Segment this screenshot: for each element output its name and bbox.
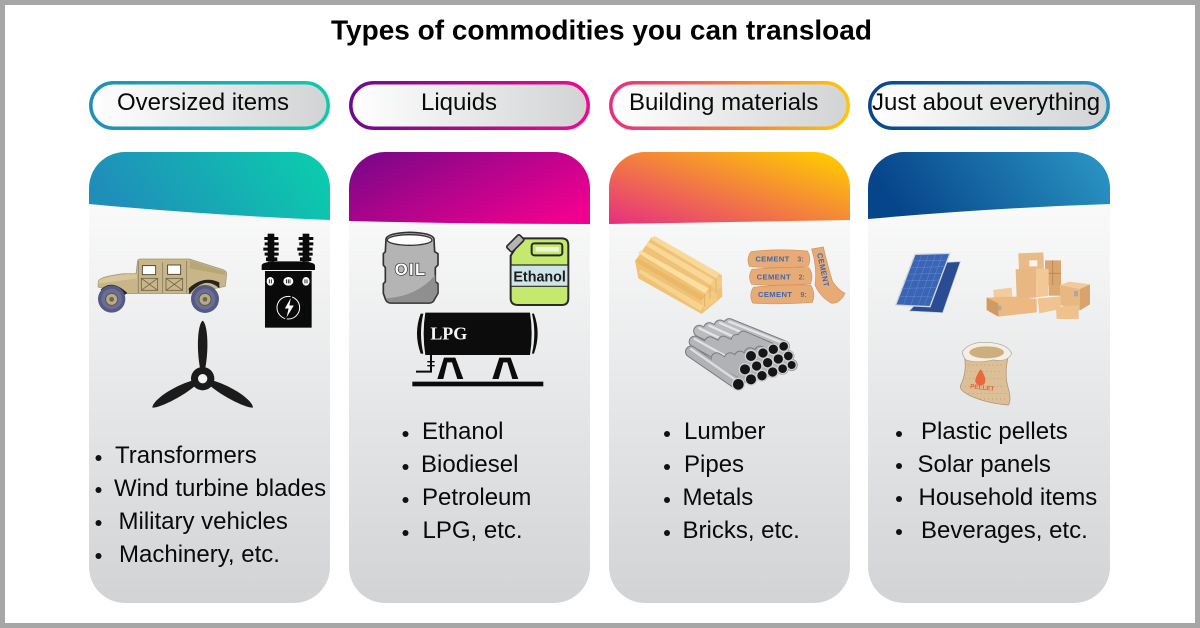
list: just about everything: Beverages, etc.: [921, 517, 1088, 544]
list: building materials: Metals: [682, 484, 753, 511]
list: oversized items: Transformers: [115, 442, 257, 469]
icon: plastic pellet sack: PELLET: [970, 383, 995, 393]
list: liquids: [402, 418, 531, 544]
icon: oil drum: OIL: [395, 260, 427, 279]
pill: Oversized items: [91, 83, 328, 128]
pill: Liquids: Liquids: [421, 89, 497, 116]
icon: cement bags: 2:: [799, 274, 805, 281]
panel header: liquids: [349, 152, 590, 224]
list: liquids: Ethanol: [422, 418, 503, 445]
panel header: just about everything: [868, 152, 1110, 219]
list: building materials: Pipes: [684, 451, 744, 478]
pill: Building materials: [611, 83, 848, 128]
title: Types of commodities you can transload: [331, 14, 872, 46]
list: building materials: Bricks, etc.: [682, 517, 800, 544]
panel: oversized items: [89, 152, 330, 603]
icon: military vehicle: [98, 259, 227, 313]
icon: cement bags: [748, 247, 845, 304]
panel header: oversized items: [89, 152, 330, 220]
list: oversized items: Military vehicles: [118, 508, 288, 535]
icon: transformer: [262, 234, 315, 328]
panel: building materials: [609, 152, 850, 603]
list: liquids: Petroleum: [422, 484, 531, 511]
icon: cement bags: CEMENT: [755, 255, 790, 264]
panel: liquids: [349, 152, 590, 603]
list: just about everything: Household items: [918, 484, 1097, 511]
pill: Just about everything: Just about everything: [872, 89, 1100, 116]
icon: stacked pipes: [691, 322, 796, 390]
icon: cement bags: CEMENT: [758, 290, 792, 299]
pill: Liquids: [351, 83, 588, 128]
icon: ethanol jerrycan: Ethanol: [513, 270, 566, 286]
list: just about everything: Plastic pellets: [921, 418, 1068, 445]
icon: cement bags: CEMENT: [815, 252, 831, 288]
icon: cardboard boxes: [987, 252, 1090, 319]
pill: Just about everything: [870, 83, 1108, 128]
icon: LPG tank: LPG: [430, 324, 467, 344]
list: oversized items: Wind turbine blades: [114, 475, 326, 502]
pill: Building materials: Building materials: [629, 89, 818, 116]
icon: cement bags: 9:: [800, 292, 807, 299]
list: liquids: LPG, etc.: [422, 517, 523, 544]
list: oversized items: Machinery, etc.: [119, 541, 280, 568]
icon: LPG tank: [412, 313, 543, 386]
list: just about everything: [896, 418, 1097, 544]
icon: wind turbine blades: [152, 321, 253, 408]
panel header: building materials: [609, 152, 850, 224]
list: liquids: Biodiesel: [421, 451, 518, 478]
icon: ethanol jerrycan: [506, 234, 568, 305]
list: building materials: Lumber: [684, 418, 765, 445]
list: just about everything: Solar panels: [918, 451, 1051, 478]
icon: cement bags: 3:: [797, 257, 804, 264]
icon: plastic pellet sack: [960, 342, 1012, 405]
list: building materials: [664, 418, 800, 544]
pill: Oversized items: Oversized items: [117, 89, 289, 116]
list: oversized items: [96, 442, 326, 568]
panel: just about everything: [868, 152, 1110, 603]
icon: solar panels: [896, 253, 960, 313]
icon: oil drum: [383, 232, 438, 303]
icon: lumber: [635, 236, 722, 314]
icon: cement bags: CEMENT: [757, 272, 791, 281]
